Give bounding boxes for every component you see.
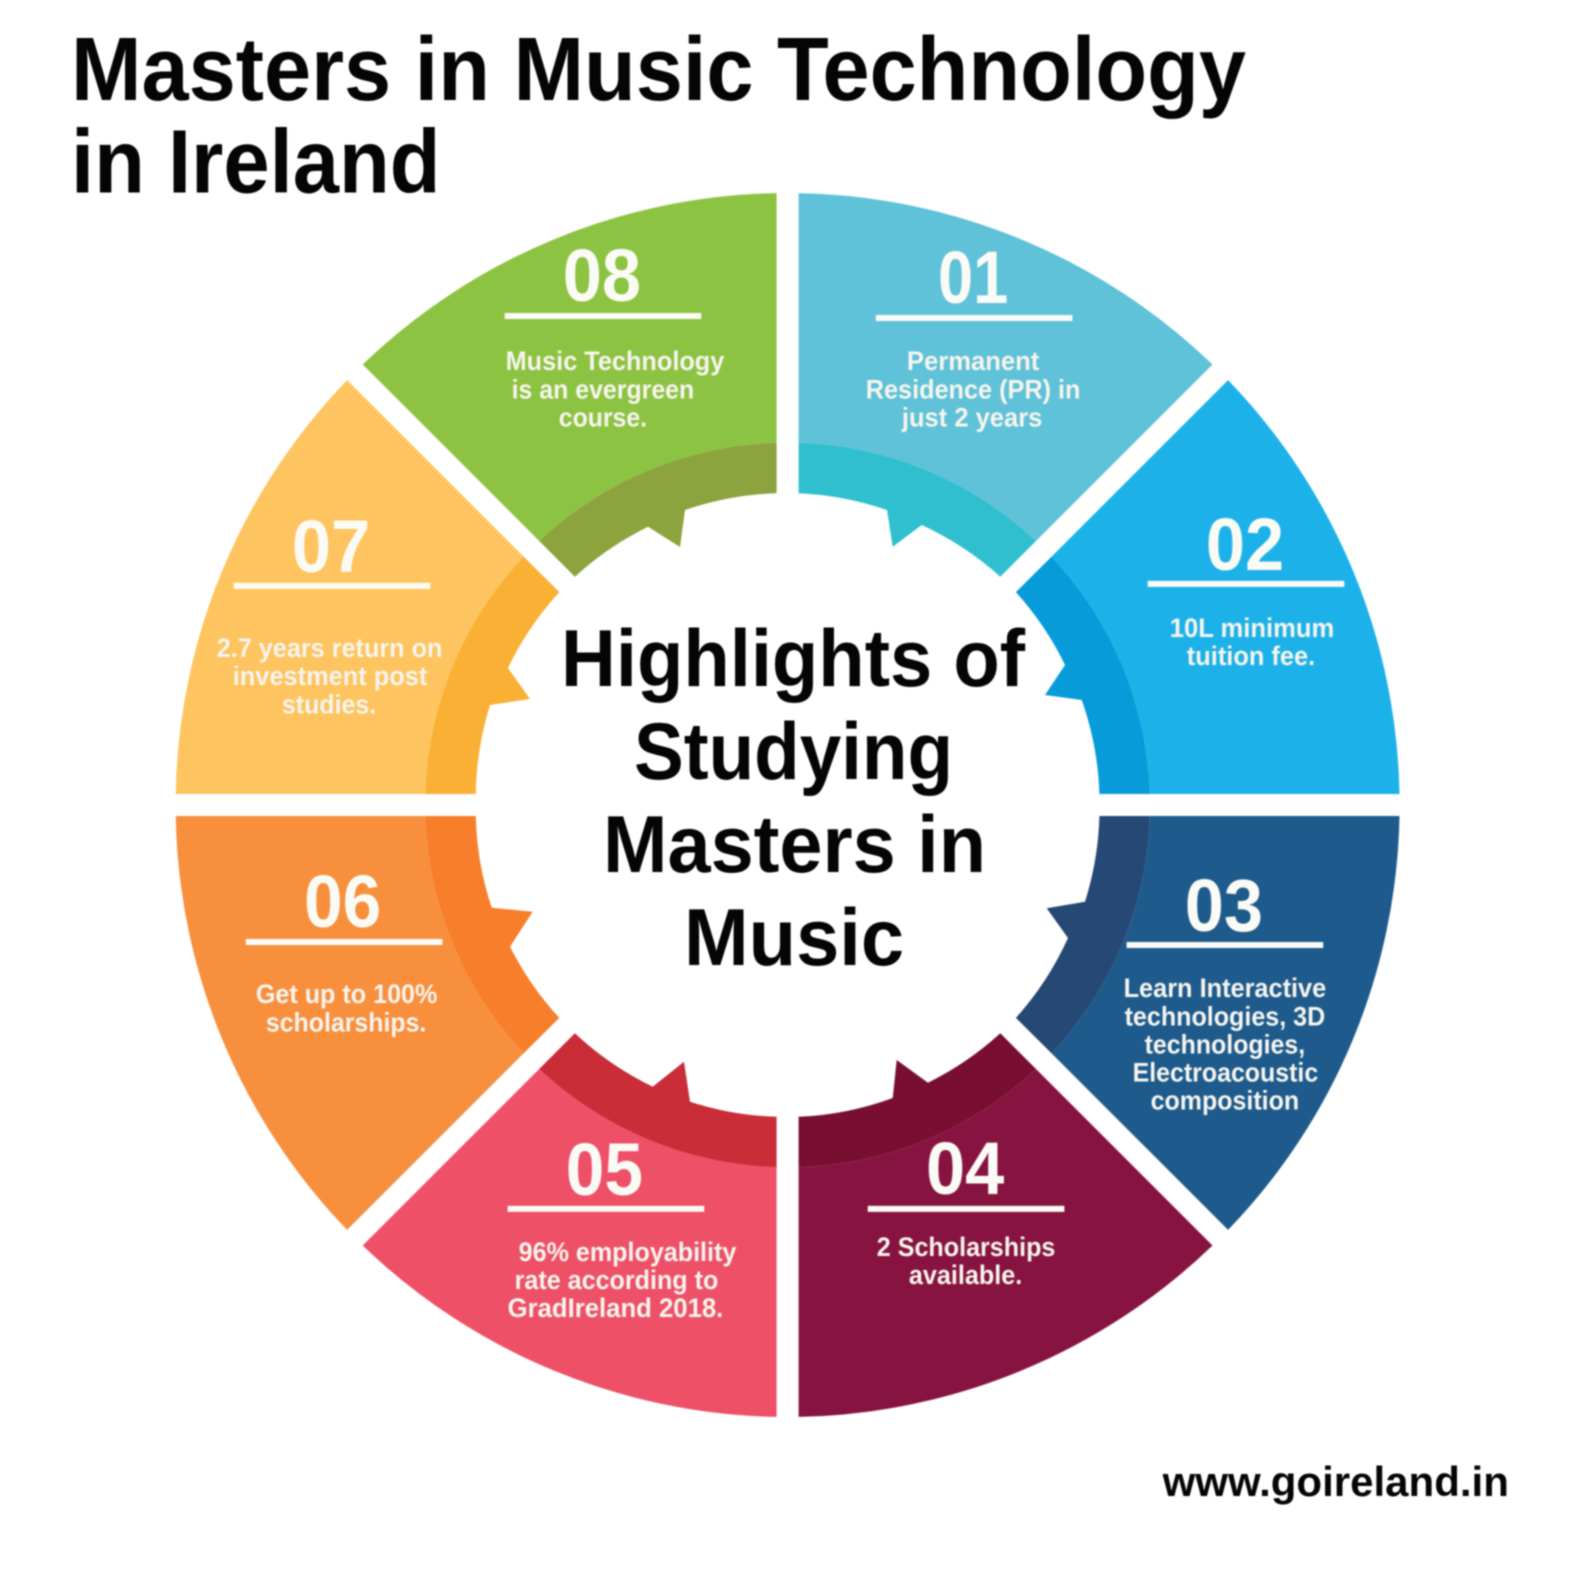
panel: segment 05 (363, 1033, 777, 1417)
panel: segment 03: Electroacoustic (1133, 1056, 1318, 1087)
center heading (561, 614, 1026, 983)
panel: segment 08: Music Technology (506, 345, 724, 376)
panel: segment 04: 2 Scholarships (877, 1231, 1055, 1262)
panel: segment 03: Learn Interactive (1124, 972, 1326, 1003)
panel: segment 03: composition (1151, 1085, 1299, 1116)
panel: segment 06: Get up to 100% (256, 978, 437, 1009)
panel: segment 02 (1016, 380, 1400, 794)
panel: segment 05: 05 (566, 1128, 643, 1211)
panel: segment 06 (176, 816, 559, 1230)
center heading: Music (684, 893, 904, 983)
panel: segment 03 (1016, 816, 1400, 1230)
panel: segment 05: 96% employability (519, 1236, 736, 1267)
title: Masters in Music Technology (71, 20, 1246, 120)
panel: segment 05: GradIreland 2018. (508, 1292, 723, 1323)
panel: segment 04: available. (909, 1259, 1022, 1290)
website url: www.goireland.in (1162, 1458, 1509, 1505)
panel: segment 01: Residence (PR) in (866, 373, 1080, 404)
panel: segment 01: just 2 years (901, 401, 1042, 432)
panel: segment 08: 08 (563, 234, 641, 317)
center heading: Masters in (603, 800, 986, 890)
panel: segment 04: 04 (926, 1127, 1004, 1210)
center heading: Highlights of (561, 614, 1026, 704)
panel: segment 03: technologies, 3D (1125, 1000, 1325, 1031)
panel: segment 02: 10L minimum (1170, 612, 1334, 643)
panel: segment 07: studies. (282, 688, 376, 719)
panel: segment 06: scholarships. (266, 1006, 426, 1037)
panel: segment 03: technologies, (1145, 1028, 1305, 1059)
panel: segment 03: 03 (1185, 864, 1263, 947)
panel: segment 07: investment post (233, 660, 427, 691)
panel: segment 07 (176, 380, 559, 794)
panel: segment 01: 01 (938, 236, 1008, 319)
panel: segment 08 (363, 193, 777, 577)
panel: segment 04 (799, 1033, 1212, 1417)
panel: segment 02: 02 (1206, 503, 1284, 586)
panel: segment 08: course. (559, 401, 647, 432)
panel: segment 02: tuition fee. (1187, 640, 1315, 671)
panel: segment 01 (799, 193, 1212, 577)
center heading: Studying (634, 707, 953, 797)
panel: segment 06: 06 (304, 860, 381, 943)
title: in Ireland (71, 113, 440, 213)
panel: segment 05: rate according to (515, 1264, 718, 1295)
panel: segment 07: 07 (292, 505, 370, 588)
panel: segment 07: 2.7 years return on (217, 632, 442, 663)
panel: segment 08: is an evergreen (512, 373, 694, 404)
title (71, 20, 1246, 213)
panel: segment 01: Permanent (907, 345, 1039, 376)
